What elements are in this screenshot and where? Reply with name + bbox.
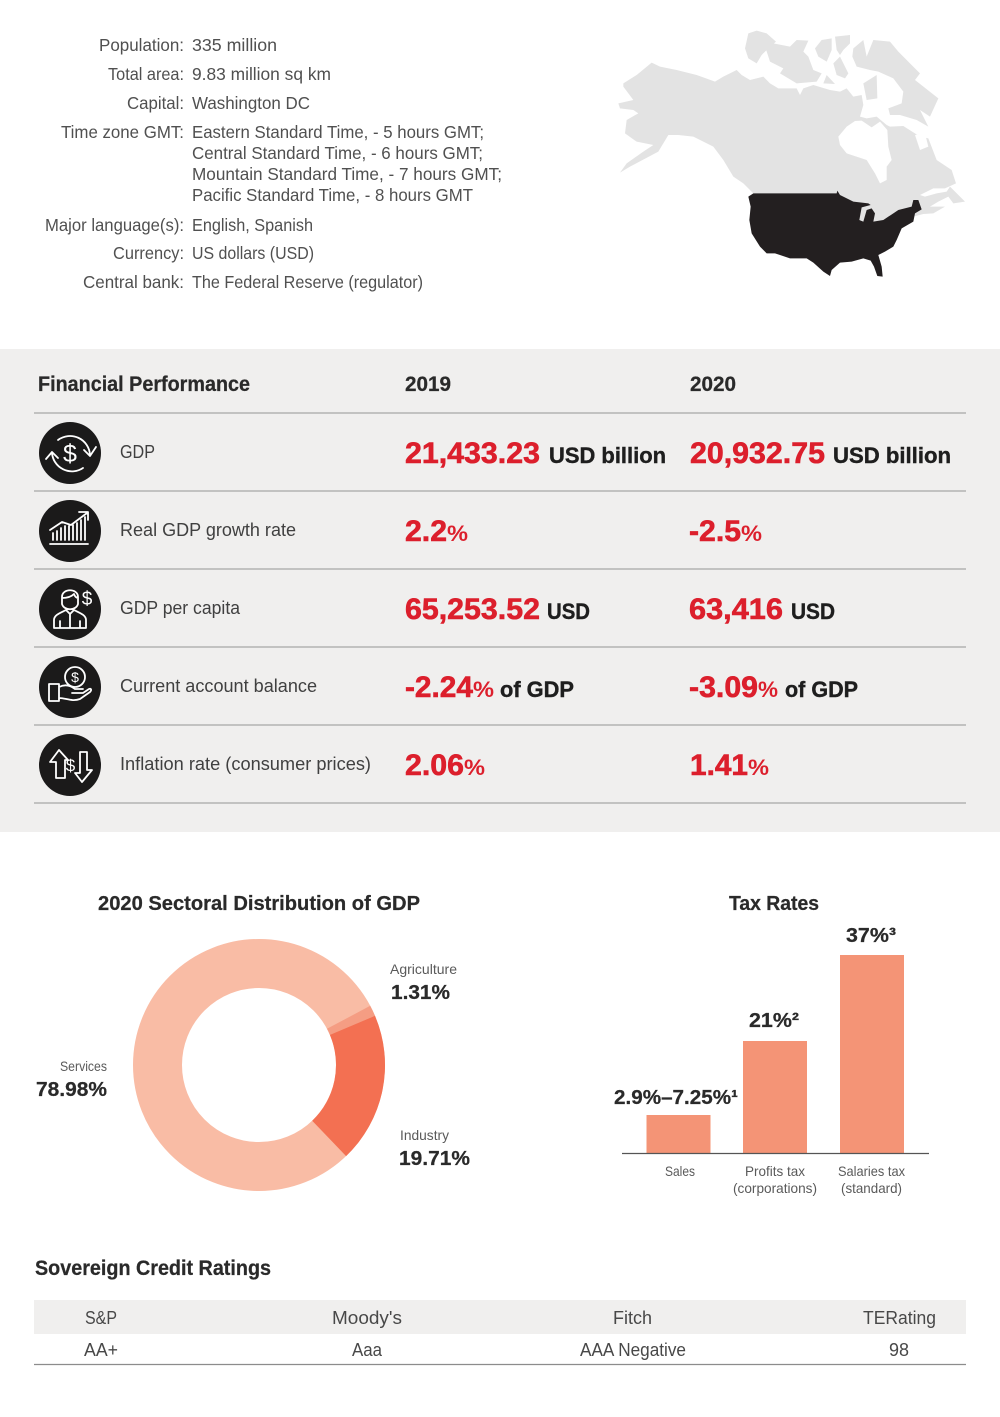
row: current account balance: of GDP [785, 677, 858, 702]
ratings: Fitch: Fitch [613, 1308, 652, 1328]
label: services [36, 1058, 107, 1101]
bar chart: (corporations) [733, 1180, 817, 1196]
row: GDP per capita: 65,253.52 [405, 593, 540, 626]
row: real GDP growth: Real GDP growth rate [120, 520, 296, 540]
panel: country facts [45, 35, 502, 292]
fact: currency: US dollars (USD) [192, 243, 314, 263]
row: current account balance: % [473, 677, 494, 702]
label: agriculture [390, 961, 457, 1004]
row: GDP: USD billion [833, 443, 951, 468]
label: industry: Industry [400, 1127, 449, 1143]
icon: business person with dollar: $ [82, 589, 93, 610]
bar chart: 37%³ [846, 925, 896, 947]
ratings: Fitch [580, 1308, 686, 1360]
bar chart: Sales [665, 1163, 695, 1179]
icon: up and down arrows with dollar [39, 734, 101, 796]
fact: languages: Major language(s): [45, 215, 184, 235]
bar chart [614, 925, 929, 1196]
fact: time zone: Mountain Standard Time, - 7 hours GMT; [192, 164, 502, 184]
icon: circulating dollar [39, 422, 101, 484]
fact: central bank: The Federal Reserve (regulator) [192, 272, 423, 292]
table header: 2019 [405, 373, 451, 396]
label: industry: 19.71% [399, 1148, 470, 1170]
icon: business person with dollar [39, 578, 101, 640]
row: current account balance [39, 656, 858, 718]
row: current account balance: of GDP [500, 677, 574, 702]
fact: central bank: Central bank: [83, 272, 184, 292]
row: GDP per capita: USD [547, 599, 590, 624]
row: inflation rate: % [748, 755, 769, 780]
heading: sectoral distribution: 2020 Sectoral Distribution of GDP [98, 893, 420, 915]
row: inflation rate: 1.41 [690, 749, 748, 782]
label: agriculture: Agriculture [390, 961, 457, 977]
ratings: S&P: AA+ [84, 1340, 118, 1360]
fact: capital: Washington DC [192, 93, 310, 113]
table header: 2020 [690, 373, 736, 396]
label: agriculture: 1.31% [391, 982, 450, 1004]
row: GDP per capita: GDP per capita [120, 598, 241, 618]
bar chart: (standard) [841, 1180, 902, 1196]
fact: time zone: Central Standard Time, - 6 hours GMT; [192, 143, 483, 163]
fact: currency [113, 243, 314, 263]
fact: total area: 9.83 million sq km [192, 64, 331, 84]
bar chart: Salaries tax [838, 1163, 905, 1179]
fact: central bank [83, 272, 423, 292]
fact: time zone [61, 122, 502, 205]
ratings: Moody's: Moody's [332, 1308, 402, 1328]
fact: total area: Total area: [108, 64, 184, 84]
row: inflation rate: % [464, 755, 485, 780]
row: GDP: USD billion [549, 443, 666, 468]
row: inflation rate: 2.06 [405, 749, 464, 782]
row: GDP per capita: 63,416 [689, 593, 783, 626]
heading: credit ratings: Sovereign Credit Ratings [35, 1257, 271, 1280]
panel: financial performance [0, 349, 1000, 832]
donut chart [158, 964, 385, 1166]
label: industry [399, 1127, 470, 1170]
panel: sectoral distribution of GDP [36, 893, 470, 1170]
row: real GDP growth: -2.5 [689, 515, 741, 548]
row: inflation rate: Inflation rate (consumer prices) [120, 754, 371, 774]
fact: time zone: Time zone GMT: [61, 122, 184, 142]
table header [38, 373, 736, 396]
row: current account balance: -3.09 [689, 671, 758, 704]
ratings: TERating: 98 [889, 1340, 909, 1360]
bar chart: Profits tax [745, 1163, 805, 1179]
row: real GDP growth: % [741, 521, 762, 546]
panel: tax rates [614, 893, 929, 1196]
row: real GDP growth [39, 500, 762, 562]
fact: capital [127, 93, 310, 113]
row: current account balance: % [758, 677, 778, 702]
panel: sovereign credit ratings [34, 1257, 966, 1364]
table header: Financial Performance [38, 373, 250, 396]
map: North America with United States highlighted [618, 31, 965, 277]
row: GDP per capita: USD [791, 599, 835, 624]
ratings: Fitch: AAA Negative [580, 1340, 686, 1360]
fact: population: 335 million [192, 35, 277, 55]
row: GDP per capita [39, 578, 835, 640]
fact: currency: Currency: [113, 243, 184, 263]
ratings: Moody's: Aaa [352, 1340, 383, 1360]
row: current account balance: Current account balance [120, 676, 317, 696]
fact: capital: Capital: [127, 93, 184, 113]
row: GDP: 21,433.23 [405, 437, 540, 470]
row: GDP [39, 422, 951, 484]
icon: hand holding coin: $ [71, 669, 79, 685]
fact: languages: English, Spanish [192, 215, 313, 235]
fact: time zone: Pacific Standard Time, - 8 hours GMT [192, 185, 473, 205]
row: real GDP growth: % [447, 521, 468, 546]
icon: up and down arrows with dollar: $ [66, 756, 76, 775]
row: real GDP growth: 2.2 [405, 515, 447, 548]
icon: hand holding coin [39, 656, 101, 718]
ratings: TERating: TERating [863, 1308, 936, 1328]
label: services: 78.98% [36, 1079, 107, 1101]
label: services: Services [60, 1058, 107, 1074]
heading: tax rates: Tax Rates [729, 893, 819, 915]
icon: circulating dollar: $ [63, 440, 77, 468]
ratings: TERating [863, 1308, 936, 1360]
row: GDP: 20,932.75 [690, 437, 825, 470]
ratings: S&P [84, 1308, 118, 1360]
row: current account balance: -2.24 [405, 671, 473, 704]
row: GDP: GDP [120, 442, 155, 462]
fact: population [99, 35, 277, 55]
icon: growth chart [39, 500, 101, 562]
fact: population: Population: [99, 35, 184, 55]
ratings: Moody's [332, 1308, 402, 1360]
fact: languages [45, 215, 313, 235]
row: inflation rate [39, 734, 769, 796]
bar chart: 2.9%–7.25%¹ [614, 1087, 738, 1109]
fact: total area [108, 64, 331, 84]
bar chart: 21%² [749, 1010, 799, 1032]
ratings: S&P: S&P [85, 1308, 117, 1328]
fact: time zone: Eastern Standard Time, - 5 hours GMT; [192, 122, 484, 142]
